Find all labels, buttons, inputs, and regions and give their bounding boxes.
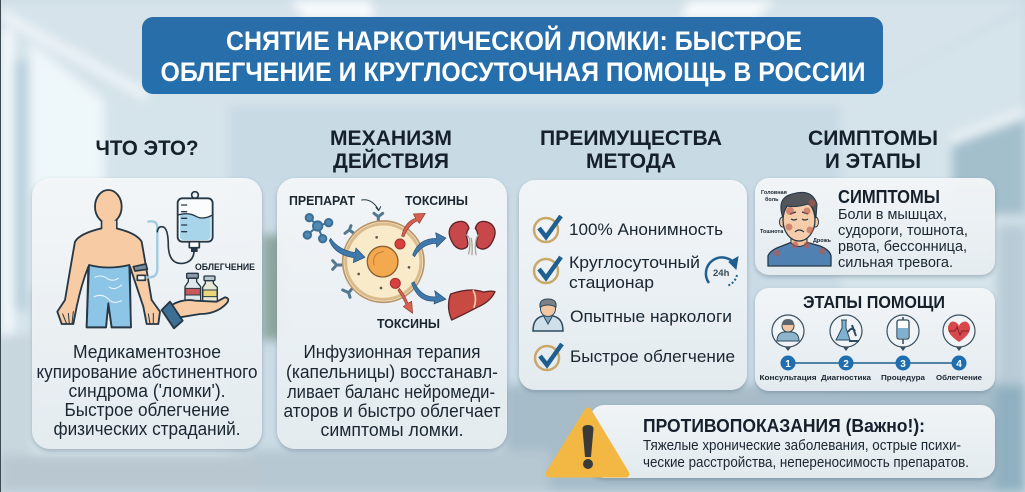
illustration: sick man bbox=[768, 192, 831, 266]
labels: symptom callouts bbox=[760, 190, 831, 244]
icon: check fast relief bbox=[535, 344, 562, 370]
labels: symptom callouts: боль bbox=[765, 196, 779, 203]
text: mechanism description: Инфузионная терапия bbox=[304, 342, 480, 362]
label: toxins top: ТОКСИНЫ bbox=[405, 194, 468, 208]
text: mechanism description: симптомы ломки. bbox=[320, 420, 464, 440]
panel: advantages bbox=[519, 180, 747, 390]
text: contraindications list: Тяжелые хронические заболевания, острые психи- bbox=[643, 438, 961, 454]
text: mechanism description: аторов и быстро облегчает bbox=[284, 401, 500, 421]
text: contraindications list: ческие расстройства, непереносимость препаратов. bbox=[643, 455, 969, 471]
text: symptoms list: рвота, бессонница, bbox=[838, 238, 967, 255]
text: fast relief: Быстрое облегчение bbox=[570, 347, 735, 366]
text: anonymity: 100% Анонимность bbox=[569, 220, 723, 239]
panel: what is it bbox=[32, 178, 262, 449]
panel: stages bbox=[755, 288, 995, 391]
text: symptoms list: судороги, тошнота, bbox=[838, 222, 968, 239]
labels: symptom callouts: Головная bbox=[761, 190, 787, 196]
heading: symptoms and stages: СИМПТОМЫ bbox=[808, 127, 938, 150]
icon: 24h clock bbox=[706, 257, 738, 286]
stage 4: relief: Облегчение bbox=[936, 373, 982, 382]
heading: symptoms and stages: И ЭТАПЫ bbox=[825, 150, 921, 173]
illustration: patient with IV drip bbox=[57, 190, 228, 328]
text: what is it description: синдрома ('ломки'). bbox=[68, 381, 226, 401]
heading: mechanism bbox=[330, 127, 452, 173]
text: what is it description: Быстрое облегчение bbox=[64, 400, 230, 420]
stage 3: procedure: Процедура bbox=[881, 373, 926, 382]
stage 2: diagnostics bbox=[821, 315, 872, 382]
heading: advantages: ПРЕИМУЩЕСТВА bbox=[540, 127, 722, 150]
text: experienced narcologists: Опытные наркологи bbox=[570, 307, 732, 326]
heading: contraindications: ПРОТИВОПОКАЗАНИЯ (Важно!): bbox=[643, 416, 925, 436]
panel: mechanism bbox=[277, 178, 507, 449]
text: round-the-clock hospital: Круглосуточный bbox=[569, 253, 700, 272]
stage 2: diagnostics: 2 bbox=[843, 359, 849, 370]
text: mechanism description: ливает баланс нейромеди- bbox=[287, 382, 495, 402]
heading: what is it: ЧТО ЭТО? bbox=[96, 137, 198, 160]
icon: check round-the-clock bbox=[534, 257, 561, 283]
stage 4: relief: 4 bbox=[956, 359, 962, 370]
heading: stages: ЭТАПЫ ПОМОЩИ bbox=[803, 292, 945, 312]
icon: doctor bbox=[533, 299, 563, 331]
text: what is it description: купирование абстинентного bbox=[36, 362, 258, 382]
heading: advantages: МЕТОДА bbox=[586, 150, 676, 173]
text: what is it description: Медикаментозное bbox=[73, 342, 221, 362]
heading: mechanism: МЕХАНИЗМ bbox=[330, 127, 452, 150]
stage 3: procedure bbox=[881, 315, 926, 382]
stage 3: procedure: 3 bbox=[900, 359, 906, 370]
title banner: ОБЛЕГЧЕНИЕ И КРУГЛОСУТОЧНАЯ ПОМОЩЬ В РОССИИ bbox=[160, 57, 866, 87]
text: mechanism description bbox=[284, 342, 500, 440]
heading: mechanism: ДЕЙСТВИЯ bbox=[333, 149, 449, 173]
heading: symptoms and stages bbox=[808, 127, 938, 173]
text: symptoms list: сильная тревога. bbox=[838, 254, 953, 271]
text: round-the-clock hospital bbox=[569, 253, 700, 292]
stage 2: diagnostics: Диагностика bbox=[821, 373, 872, 382]
stage 1: consultation: 1 bbox=[785, 359, 791, 370]
text: mechanism description: (капельницы) восстанавл- bbox=[286, 362, 498, 382]
text: symptoms list: Боли в мышцах, bbox=[838, 206, 947, 223]
title banner: СНЯТИЕ НАРКОТИЧЕСКОЙ ЛОМКИ: БЫСТРОЕ bbox=[226, 26, 802, 56]
panel: contraindications bbox=[549, 405, 995, 478]
heading: advantages bbox=[540, 127, 722, 173]
text: symptoms list bbox=[838, 206, 968, 271]
icon: 24h clock: 24h bbox=[713, 268, 730, 279]
text: what is it description bbox=[36, 342, 258, 439]
timeline line bbox=[788, 362, 959, 364]
text: what is it description: физических страданий. bbox=[54, 419, 240, 439]
text: contraindications list bbox=[643, 438, 969, 471]
icon: warning triangle bbox=[549, 411, 626, 474]
label: drug: ПРЕПАРАТ bbox=[289, 194, 355, 208]
labels: symptom callouts: Тошнота bbox=[760, 229, 784, 235]
title banner bbox=[142, 17, 883, 94]
labels: symptom callouts: Дрожь bbox=[813, 238, 831, 244]
stage 4: relief bbox=[936, 315, 982, 382]
label: relief: ОБЛЕГЧЕНИЕ bbox=[195, 262, 255, 272]
illustration: cell, drug, toxins, organs bbox=[304, 200, 495, 320]
heading: symptoms: СИМПТОМЫ bbox=[838, 187, 940, 207]
panel: symptoms bbox=[755, 178, 995, 275]
label: toxins bottom: ТОКСИНЫ bbox=[377, 317, 440, 331]
stage 1: consultation: Консультация bbox=[760, 373, 816, 382]
text: round-the-clock hospital: стационар bbox=[569, 273, 654, 292]
icon: check anonymity bbox=[534, 216, 561, 242]
stage 1: consultation bbox=[760, 315, 816, 382]
